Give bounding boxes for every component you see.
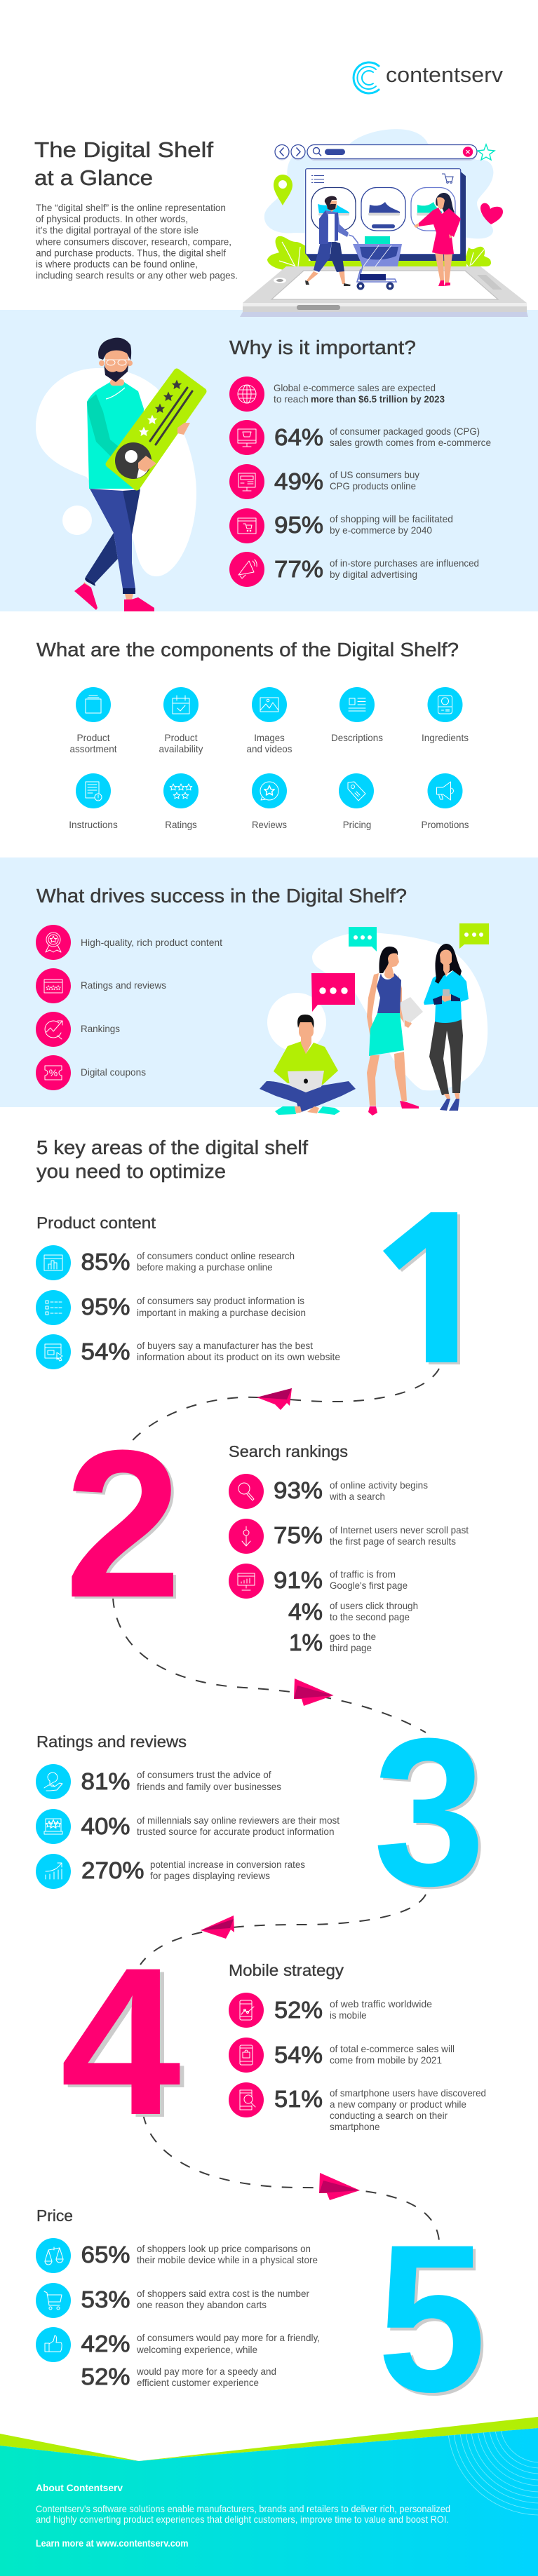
description — [137, 1250, 295, 1273]
component: descriptions: Descriptions — [331, 732, 383, 743]
panel: components of the digital shelf — [36, 639, 469, 830]
subheading: Price — [36, 2206, 73, 2225]
description — [137, 1340, 340, 1362]
stat: 1%: third page — [330, 1642, 372, 1653]
component: ratings — [163, 773, 199, 830]
stat: 93%: 93% — [274, 1477, 323, 1503]
speech bubbles — [311, 923, 489, 1012]
description: of millennials say online reviewers are their most — [137, 1815, 339, 1826]
stat: 64% — [229, 420, 491, 455]
description: of consumers say product information is — [137, 1295, 304, 1306]
description — [137, 1815, 339, 1837]
panel: price — [36, 2200, 486, 2436]
stat: 95%: 95% — [274, 512, 323, 538]
description: of consumers trust the advice of — [137, 1769, 271, 1780]
description: of total e-commerce sales will — [330, 2043, 455, 2054]
blobs — [267, 933, 487, 1090]
title: The Digital Shelf — [34, 137, 213, 162]
stat: 54%: 54% — [274, 2042, 323, 2068]
subheading: Product content — [36, 1214, 156, 1232]
search bar — [307, 144, 477, 161]
description: smartphone — [330, 2121, 380, 2132]
stat: 81%: 81% — [81, 1768, 130, 1794]
icon: globe — [229, 377, 264, 412]
stat: 1% — [289, 1629, 376, 1655]
driver: rankings — [36, 1012, 120, 1047]
subheading: Search rankings — [229, 1442, 348, 1460]
shopping cart — [349, 235, 402, 290]
component: images and videos: and videos — [247, 743, 292, 754]
description — [136, 2332, 320, 2355]
component: product assortment: Product — [77, 732, 110, 743]
stat: 49%: 49% — [274, 468, 323, 494]
stat: 42% — [36, 2327, 320, 2362]
icon: magnifier — [229, 1474, 264, 1509]
icon: heart — [480, 203, 503, 224]
component: descriptions — [331, 687, 383, 743]
stat: 81% — [36, 1764, 281, 1799]
footer background — [0, 2428, 538, 2576]
icon: scales — [36, 2238, 71, 2273]
stat: 65% — [36, 2238, 318, 2273]
component: reviews — [252, 773, 287, 830]
description: of consumers would pay more for a friendly, — [137, 2332, 320, 2343]
description: of consumer packaged goods (CPG) — [330, 426, 480, 437]
icon: browser chart — [36, 1245, 71, 1280]
stat: 54%: 54% — [81, 1338, 130, 1364]
driver: digital coupons: % — [49, 1067, 58, 1078]
description — [330, 557, 479, 580]
description — [150, 1859, 305, 1881]
stat: 64%: 64% — [274, 424, 323, 450]
panel: mobile strategy — [60, 1923, 486, 2159]
driver: digital coupons: Digital coupons — [81, 1066, 146, 1078]
driver: digital coupons — [36, 1055, 146, 1090]
description: of consumers conduct online research — [137, 1250, 295, 1261]
man holding rating card — [74, 338, 203, 611]
description: for pages displaying reviews — [150, 1870, 270, 1881]
section heading: 5 key areas — [36, 1137, 308, 1182]
stat: 52% — [229, 1993, 432, 2028]
panel: product content — [36, 1172, 497, 1407]
description: conducting a search on their — [330, 2110, 448, 2121]
about text: and highly converting product experiences that delight customers, improve time to value and boost ROI. — [36, 2514, 449, 2525]
description: their mobile device while in a physical store — [137, 2254, 318, 2265]
big number 1: 1 — [379, 1172, 497, 1407]
stat: 4%: 4% — [288, 1599, 323, 1625]
description — [330, 426, 491, 448]
shop screen — [306, 169, 466, 261]
heading: What drives success in the Digital Shelf? — [36, 885, 407, 907]
woman in pink dress — [414, 193, 461, 286]
intro paragraph: including search results or any other web pages. — [36, 269, 238, 280]
description — [329, 1479, 428, 1502]
stat: 85%: 85% — [81, 1249, 130, 1275]
description — [137, 2243, 318, 2265]
description: Google's first page — [330, 1580, 408, 1591]
component: pricing: Pricing — [343, 819, 371, 830]
about text — [36, 2503, 450, 2525]
description: to reach — [274, 393, 309, 405]
description: of in-store purchases are influenced — [330, 557, 479, 569]
stat: 4%: of users click through — [330, 1600, 418, 1611]
description: of web traffic worldwide — [330, 1998, 432, 2009]
intro paragraph — [35, 202, 238, 280]
arrow: from 2 to 3 — [113, 1597, 426, 1733]
description — [274, 382, 445, 405]
rating card — [109, 372, 203, 487]
icon: location pin — [274, 175, 292, 205]
description: of traffic is from — [330, 1568, 396, 1580]
title: at a Glance — [34, 165, 153, 190]
woman in blue top and teal skirt — [367, 947, 423, 1116]
component: instructions: Instructions — [69, 819, 118, 830]
title — [34, 137, 213, 190]
stat: 91%: 91% — [274, 1567, 323, 1593]
icon: checklist — [36, 1290, 71, 1325]
stat: 51%: 51% — [274, 2086, 323, 2112]
icon: phone with graph — [229, 1993, 264, 2028]
section heading: 5 key areas: 5 key areas of the digital shelf — [36, 1137, 308, 1158]
description: of smartphone users have discovered — [330, 2087, 486, 2099]
description: come from mobile by 2021 — [330, 2054, 442, 2066]
description — [137, 1769, 281, 1792]
description: of US consumers buy — [330, 469, 419, 480]
description — [330, 1568, 408, 1591]
logo: contentserv — [354, 62, 504, 93]
stat: 95% — [229, 508, 453, 543]
stat: 52%: 52% — [274, 1997, 323, 2023]
paper plane 2 — [294, 1679, 334, 1706]
component: ratings: Ratings — [165, 819, 197, 830]
stat: 75% — [229, 1519, 469, 1554]
component: product availability: availability — [159, 743, 203, 754]
icon: scroll down — [229, 1519, 264, 1554]
stat: 1%: 1% — [289, 1629, 323, 1655]
about text: Contentserv's software solutions enable manufacturers, brands and retailers to deliver rich, personalized — [36, 2503, 450, 2514]
stat: 4%: to the second page — [330, 1611, 410, 1622]
icon: monitor with cart — [229, 420, 264, 455]
icon: thumbs up — [36, 2327, 71, 2362]
description: of buyers say a manufacturer has the best — [137, 1340, 313, 1351]
description — [330, 1998, 432, 2021]
stat: 52%: efficient customer experience — [137, 2377, 259, 2388]
stat: 93% — [229, 1474, 428, 1509]
description: one reason they abandon carts — [137, 2299, 267, 2310]
description: by digital advertising — [330, 569, 417, 580]
browser navigation buttons — [275, 144, 306, 160]
about heading: About Contentserv — [36, 2482, 123, 2493]
stat: 49% — [229, 464, 419, 499]
green accent band — [0, 2417, 538, 2461]
description — [330, 1524, 469, 1547]
footer — [0, 2417, 538, 2576]
intro paragraph: of physical products. In other words, — [36, 213, 188, 224]
panel: ratings and reviews — [36, 1694, 485, 1930]
intro paragraph: it's the digital portrayal of the store isle — [36, 224, 199, 236]
description: friends and family over businesses — [137, 1781, 281, 1792]
intro paragraph: and purchase products. Thus, the digital shelf — [36, 247, 226, 258]
description: with a search — [329, 1491, 385, 1502]
concentric arcs — [448, 2431, 538, 2516]
arrow: from 1 to 2 — [128, 1369, 439, 1446]
section heading: 5 key areas: you need to optimize — [36, 1160, 226, 1182]
stat: 4% — [288, 1599, 418, 1625]
icon: monitor with storefront — [229, 464, 264, 499]
background blob — [264, 129, 493, 238]
icon: phone with bag — [229, 2038, 264, 2073]
icon: monitor chart — [229, 1564, 264, 1599]
tablet — [240, 266, 528, 317]
description: is mobile — [330, 2009, 367, 2021]
man with shopping cart — [305, 196, 351, 286]
big number 2: 2 — [65, 1406, 182, 1641]
description — [137, 2288, 309, 2310]
stat: 40% — [36, 1809, 339, 1844]
intro paragraph: where consumers discover, research, compare, — [35, 236, 231, 247]
arrow: from 4 to 5 — [143, 2114, 439, 2241]
description — [330, 2043, 455, 2066]
heading: What are the components of the Digital Shelf? — [36, 639, 459, 660]
component: ingredients — [422, 687, 469, 743]
description: of shoppers said extra cost is the number — [137, 2288, 309, 2299]
description: by e-commerce by 2040 — [330, 524, 432, 536]
description: of online activity begins — [330, 1479, 428, 1491]
stat: 270%: 270% — [81, 1857, 144, 1883]
icon: growth chart — [36, 1854, 71, 1889]
icon: phone with magnifier — [229, 2082, 264, 2117]
description: Global e-commerce sales are expected — [274, 382, 436, 393]
description: more than $6.5 trillion by 2023 — [311, 393, 445, 405]
panel: what drives success background — [0, 857, 538, 1107]
stat: 91% — [229, 1564, 408, 1599]
big number 5: 5 — [377, 2200, 486, 2436]
description — [330, 469, 419, 492]
stat: 77%: 77% — [274, 556, 323, 582]
stat: 270% — [36, 1854, 305, 1889]
stat: global e-commerce sales — [229, 377, 445, 412]
driver: ratings and reviews — [36, 968, 166, 1003]
description: CPG products online — [330, 480, 416, 492]
learn more link: Learn more at www.contentserv.com — [36, 2537, 188, 2549]
stat: 53% — [36, 2283, 309, 2318]
description — [137, 1295, 306, 1318]
description: important in making a purchase decision — [137, 1307, 306, 1318]
driver: ratings and reviews: Ratings and reviews — [81, 979, 166, 991]
driver: high-quality content: High-quality, rich product content — [81, 937, 222, 948]
stat: 65%: 65% — [81, 2242, 130, 2267]
description: a new company or product while — [330, 2099, 466, 2110]
subheading: Mobile strategy — [229, 1961, 344, 1979]
component: product assortment — [70, 687, 117, 754]
icon: browser with cursor — [36, 1334, 71, 1369]
description: of Internet users never scroll past — [330, 1524, 469, 1536]
paper plane 4 — [319, 2173, 360, 2200]
icon: star — [478, 144, 495, 160]
stat: 40%: 40% — [81, 1813, 130, 1839]
stat: 52%: would pay more for a speedy and — [136, 2366, 276, 2377]
people illustration — [260, 923, 489, 1116]
component: instructions — [69, 773, 118, 830]
seated man with laptop — [260, 1015, 356, 1115]
panel: what drives success — [36, 885, 489, 1116]
component: product availability: Product — [164, 732, 198, 743]
stat: 75%: 75% — [274, 1522, 323, 1548]
panel: search rankings — [65, 1406, 469, 1655]
icon: hand with speech bubble — [36, 1764, 71, 1799]
component: images and videos — [247, 687, 292, 754]
panel: why is it important — [36, 337, 491, 611]
description: before making a purchase online — [137, 1261, 273, 1273]
icon: browser with cart — [229, 508, 264, 543]
description: information about its product on its own website — [137, 1351, 340, 1362]
icon: megaphone — [229, 552, 264, 587]
stat: 51% — [229, 2082, 486, 2132]
component: ingredients: Ingredients — [422, 732, 469, 743]
description: the first page of search results — [330, 1536, 456, 1547]
driver: high-quality content — [36, 925, 222, 960]
component: promotions: Promotions — [421, 819, 469, 830]
stat: 1%: goes to the — [330, 1631, 376, 1642]
logo: contentserv: contentserv — [386, 62, 504, 87]
component: promotions — [421, 773, 469, 830]
stat: 52% — [81, 2364, 276, 2389]
white blobs — [36, 368, 196, 576]
component: reviews: Reviews — [252, 819, 287, 830]
plants — [267, 236, 491, 270]
paper plane 3 — [201, 1916, 234, 1939]
big number 4: 4 — [60, 1923, 182, 2159]
hero illustration: online shop on tablet — [240, 129, 528, 317]
stat: 52%: 52% — [81, 2364, 130, 2389]
heading: Why is it important? — [229, 337, 416, 358]
component: product availability — [159, 687, 203, 754]
stat: 54% — [36, 1334, 340, 1369]
description: of shoppers look up price comparisons on — [137, 2243, 311, 2254]
big number 3: 3 — [373, 1694, 485, 1930]
icon: cart — [36, 2283, 71, 2318]
driver: rankings: Rankings — [81, 1023, 120, 1034]
stat: 42%: 42% — [81, 2331, 130, 2357]
intro paragraph: is where products can be found online, — [36, 258, 198, 269]
component: pricing — [339, 773, 374, 830]
arrow: from 3 to 4 — [140, 1894, 426, 1965]
stat: 95% — [36, 1290, 306, 1325]
stat: 54% — [229, 2038, 455, 2073]
panel: why is it important background — [0, 310, 538, 611]
paper plane 1 — [257, 1388, 292, 1410]
description: potential increase in conversion rates — [150, 1859, 305, 1870]
intro paragraph: The “digital shelf” is the online representation — [36, 202, 226, 213]
stat: 85% — [36, 1245, 295, 1280]
icon: laptop with stars — [36, 1809, 71, 1844]
subheading: Ratings and reviews — [36, 1733, 187, 1751]
stat: 53%: 53% — [81, 2286, 130, 2312]
woman in cyan shirt with phone — [424, 944, 469, 1111]
stat: 77% — [229, 552, 479, 587]
description: sales growth comes from e-commerce — [330, 437, 491, 448]
component: product assortment: assortment — [70, 743, 117, 754]
description — [330, 513, 453, 536]
component: images and videos: Images — [254, 732, 285, 743]
description: of shopping will be facilitated — [330, 513, 453, 524]
stat: 95%: 95% — [81, 1294, 130, 1320]
description — [330, 2087, 486, 2132]
description: welcoming experience, while — [136, 2344, 257, 2355]
description: trusted source for accurate product information — [137, 1826, 334, 1837]
